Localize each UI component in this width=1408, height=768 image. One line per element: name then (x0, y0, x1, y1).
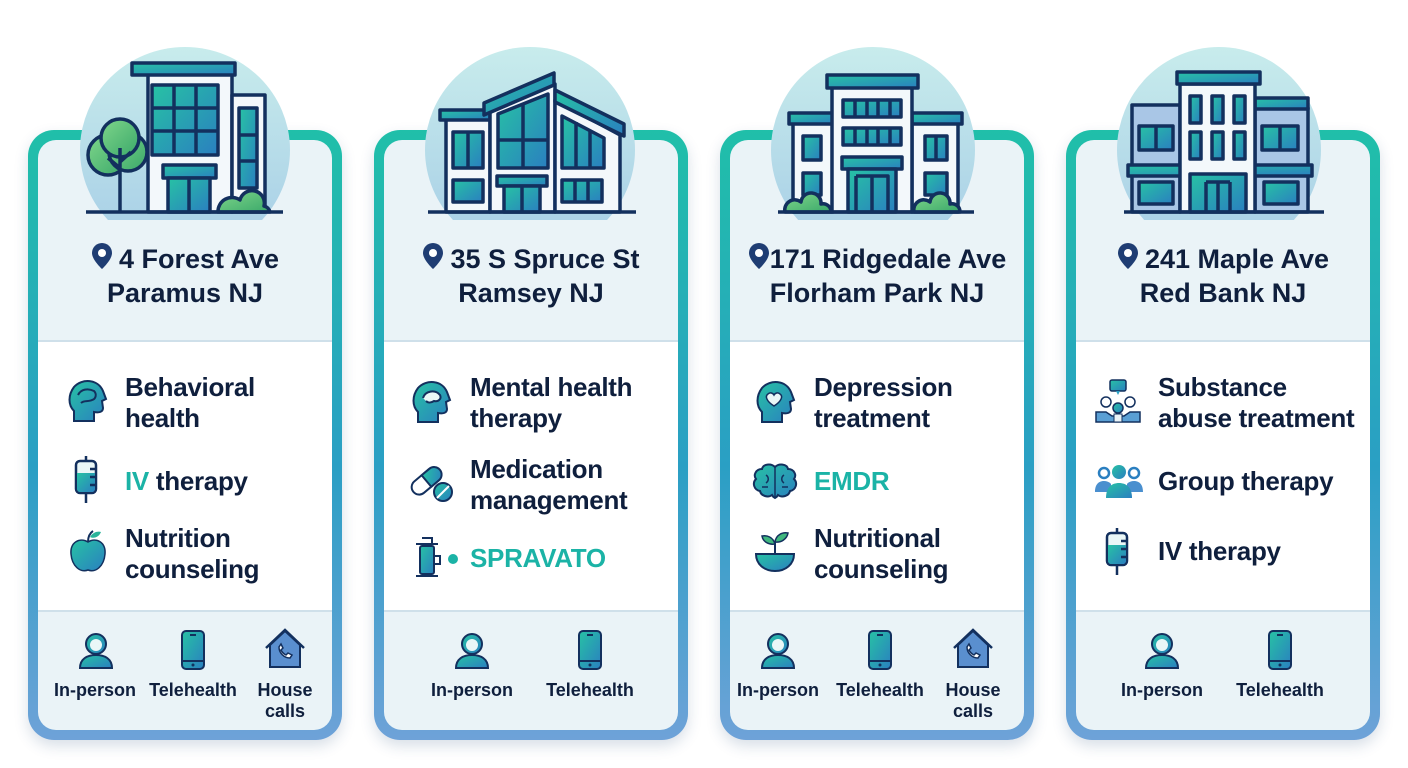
services 2: management (470, 485, 627, 515)
modes 1 (54, 628, 312, 721)
modes 1: Telehealth (149, 680, 237, 700)
services 1: IV therapy (125, 466, 248, 496)
services 2: Medication (470, 454, 603, 484)
address 4: Red Bank NJ (1140, 278, 1306, 308)
building 2 (425, 47, 636, 220)
services 4: IV therapy (1158, 536, 1281, 566)
modes 4: In-person (1121, 680, 1203, 700)
address 2: 35 S Spruce St (450, 244, 640, 274)
services 2: therapy (470, 403, 562, 433)
icon: in-person (1145, 633, 1179, 669)
modes 3: House (945, 680, 1000, 700)
icon: pills (410, 466, 453, 502)
services 2 (410, 372, 632, 577)
building 1 (80, 47, 290, 220)
icon: brain (752, 464, 798, 500)
modes 3: Telehealth (836, 680, 924, 700)
icon: head heart (756, 381, 796, 423)
address 2 (423, 243, 640, 308)
address 3: 171 Ridgedale Ave (770, 244, 1006, 274)
services 3: Depression (814, 372, 953, 402)
card 4: Red Bank (1066, 130, 1380, 740)
address 1 (92, 243, 279, 308)
icon: support group (1095, 379, 1141, 423)
modes 4 (1121, 630, 1324, 700)
services 4: Group therapy (1158, 466, 1333, 496)
icon: house call (953, 628, 993, 668)
icon: phone (181, 630, 205, 670)
building 4 (1117, 47, 1324, 220)
icon: house call (265, 628, 305, 668)
address 1: Paramus NJ (107, 278, 263, 308)
icon: phone (1268, 630, 1292, 670)
address 3 (749, 243, 1006, 308)
modes 3: calls (953, 701, 993, 721)
modes 3 (737, 628, 1000, 721)
address 1: 4 Forest Ave (119, 244, 279, 274)
icon: IV bag (1106, 528, 1128, 575)
services 4: abuse treatment (1158, 403, 1354, 433)
icon: apple (70, 530, 106, 572)
services 4: Substance (1158, 372, 1287, 402)
icon: IV bag (74, 456, 98, 503)
icon: phone (868, 630, 892, 670)
address 3: Florham Park NJ (770, 278, 984, 308)
address 4: 241 Maple Ave (1145, 244, 1329, 274)
services 2: Mental health (470, 372, 632, 402)
icon: bowl with sprout (755, 532, 795, 572)
services 3 (752, 372, 953, 584)
modes 2 (431, 630, 634, 700)
services 3: counseling (814, 554, 948, 584)
modes 1: House (257, 680, 312, 700)
services 1: health (125, 403, 200, 433)
icon: phone (578, 630, 602, 670)
address 4 (1118, 243, 1329, 308)
icon: head (412, 381, 452, 423)
services 2: SPRAVATO (470, 543, 606, 573)
services 1 (68, 372, 259, 584)
modes 2: Telehealth (546, 680, 634, 700)
building 3 (771, 47, 975, 220)
services 4 (1095, 372, 1354, 575)
address 2: Ramsey NJ (458, 278, 604, 308)
card 1: Paramus (28, 130, 342, 740)
icon: in-person (455, 633, 489, 669)
services 1: counseling (125, 554, 259, 584)
modes 3: In-person (737, 680, 819, 700)
card 2: Ramsey (374, 130, 688, 740)
icon: group (1095, 465, 1143, 498)
services 3: treatment (814, 403, 930, 433)
modes 4: Telehealth (1236, 680, 1324, 700)
card 3: Florham Park (720, 130, 1034, 740)
services 1: Nutrition (125, 523, 231, 553)
icon: spray device (416, 537, 458, 577)
modes 2: In-person (431, 680, 513, 700)
services 3: EMDR (814, 466, 889, 496)
icon: in-person (761, 633, 795, 669)
icon: in-person (79, 633, 113, 669)
modes 1: In-person (54, 680, 136, 700)
services 1: Behavioral (125, 372, 255, 402)
icon: head brain (68, 380, 108, 422)
modes 1: calls (265, 701, 305, 721)
services 3: Nutritional (814, 523, 941, 553)
